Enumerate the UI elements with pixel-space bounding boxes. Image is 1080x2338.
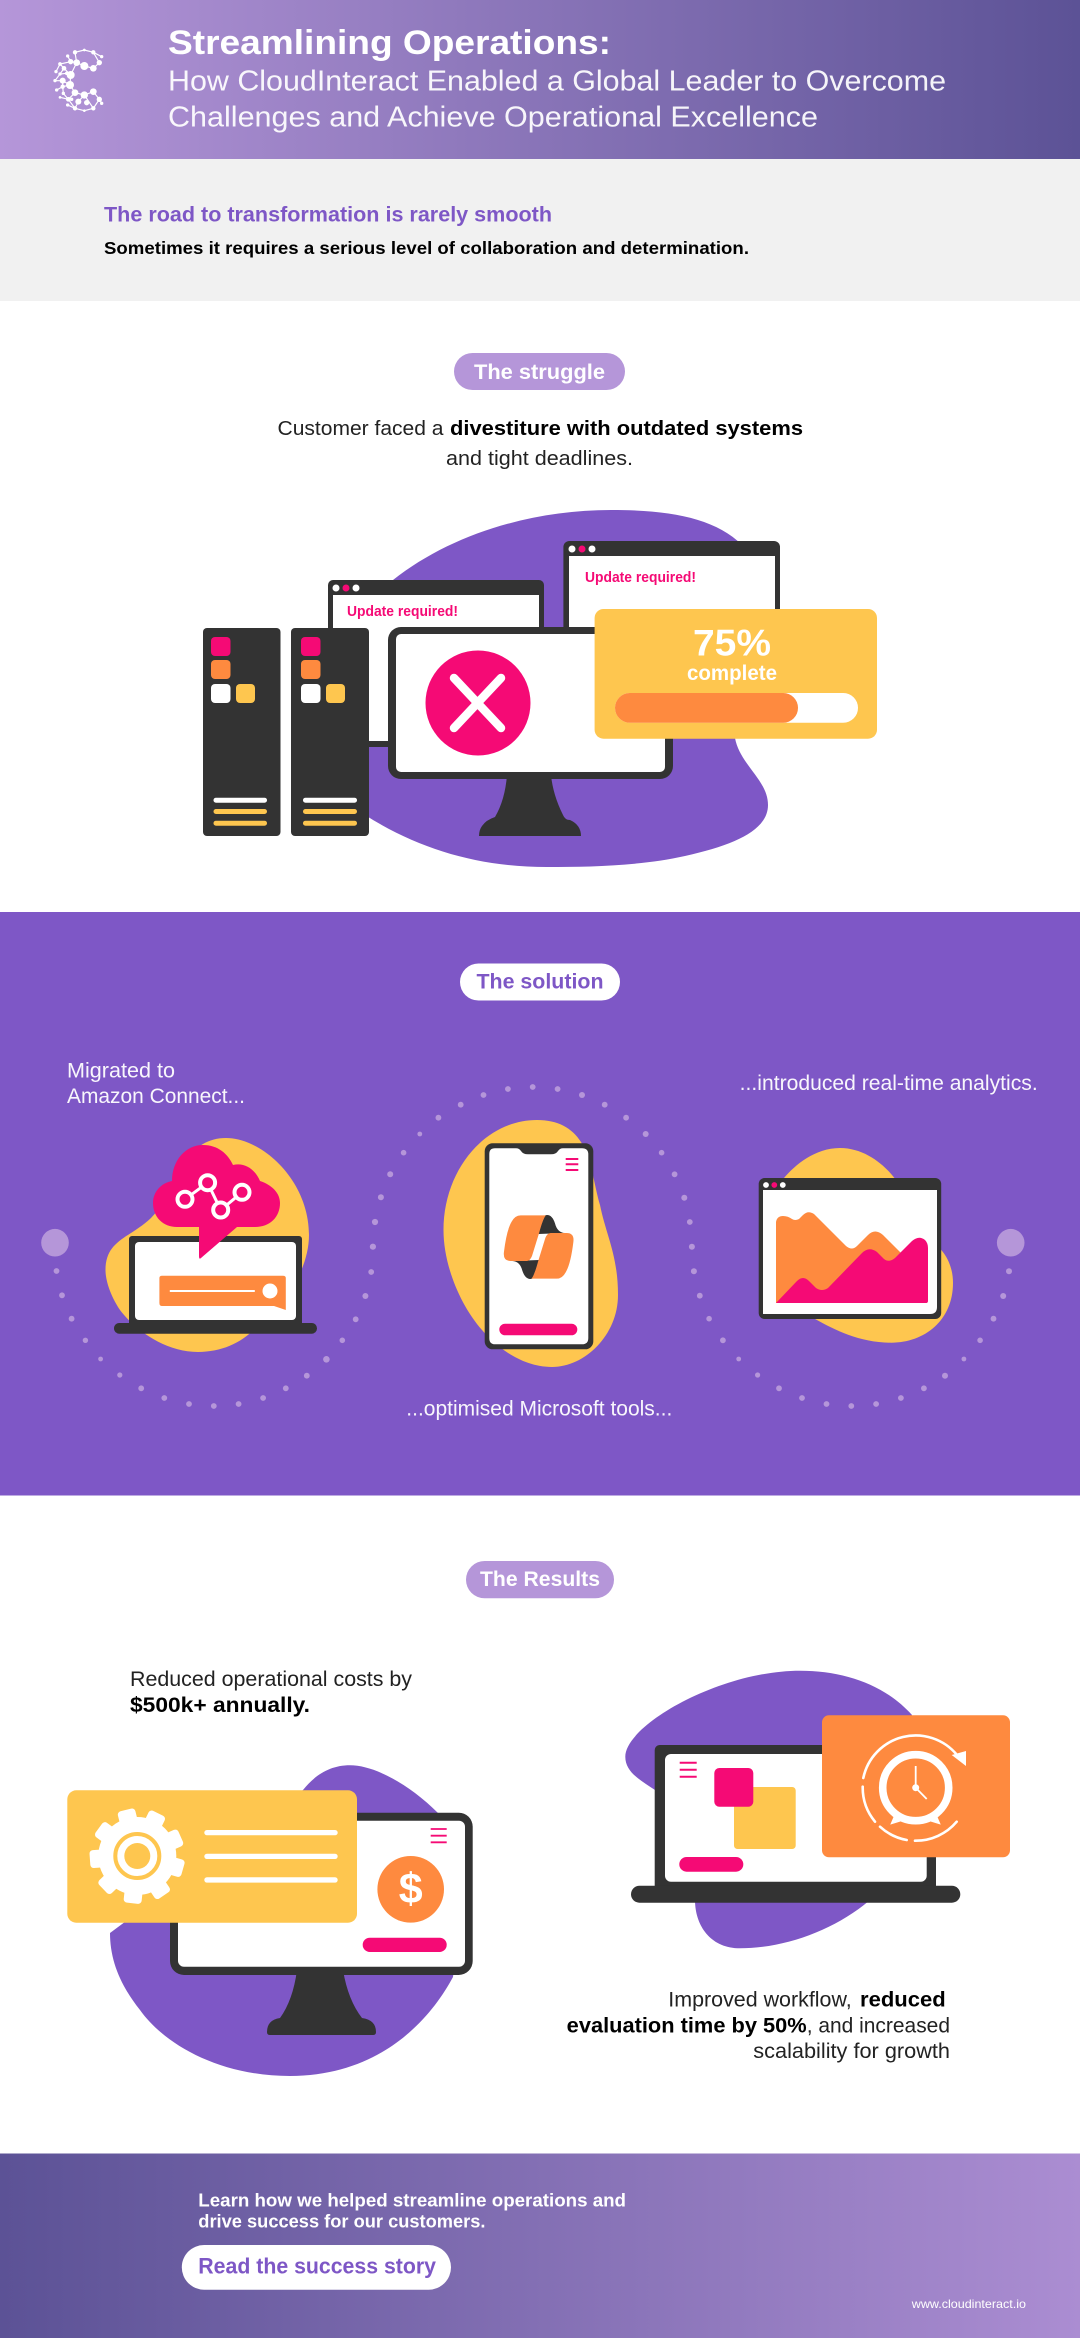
icon: dollar coin: $ (399, 1865, 423, 1913)
browser window (759, 1178, 941, 1319)
panel: the solution (0, 912, 1080, 1496)
label: optimised: ...optimised Microsoft tools... (406, 1398, 672, 1420)
background blob (365, 510, 768, 867)
purple blob (625, 1671, 912, 1948)
button (363, 1938, 447, 1952)
icon: menu (566, 1159, 578, 1170)
result text: costs: $500k+ annually. (130, 1694, 310, 1717)
pill heading: the results (466, 1561, 614, 1598)
icon: copilot logo (504, 1215, 574, 1279)
phone screen (489, 1148, 588, 1344)
icon: gear (89, 1808, 185, 1904)
title: Streamlining Operations: (168, 24, 611, 62)
button (679, 1857, 743, 1872)
website url: www.cloudinteract.io (911, 2297, 1026, 2311)
call to action text: drive success for our customers. (198, 2212, 486, 2232)
intro heading: The road to transformation is rarely smooth (104, 204, 552, 226)
area chart (776, 1212, 928, 1303)
subtitle: Challenges and Achieve Operational Excellence (168, 102, 818, 134)
struggle description: and tight deadlines. (446, 448, 633, 470)
pill heading: the results: The Results (480, 1568, 600, 1591)
dotted path (41, 1084, 1024, 1409)
illustration: phone with logo (444, 1120, 618, 1367)
label: migrated: Migrated to (67, 1060, 175, 1082)
result text: workflow (567, 1989, 950, 2063)
phone (485, 1143, 593, 1349)
window: update required left (328, 580, 544, 747)
result text: costs: Reduced operational costs by (130, 1668, 413, 1691)
button: read the success story: Read the success story (198, 2254, 437, 2278)
window: update required right: Update required! (585, 569, 696, 586)
call to action text: Learn how we helped streamline operations and (198, 2190, 626, 2210)
subtitle (168, 66, 946, 134)
illustration: laptop with cloud (106, 1138, 317, 1352)
illustration: cost savings (67, 1765, 473, 2076)
server left (203, 628, 280, 836)
header banner (0, 0, 1080, 159)
yellow blob (444, 1120, 618, 1367)
settings card (67, 1790, 357, 1923)
result text: workflow: , and increased (807, 2015, 950, 2038)
phone button (499, 1324, 577, 1335)
purple blob (110, 1765, 470, 2076)
progress card (595, 609, 877, 739)
yellow blob (106, 1138, 309, 1352)
yellow square (734, 1787, 796, 1849)
illustration: analytics window (759, 1148, 953, 1343)
label: migrated (67, 1060, 245, 1108)
result text: workflow: reduced (860, 1989, 946, 2012)
illustration: workflow (625, 1671, 1010, 1948)
result text: workflow: evaluation time by 50% (567, 2015, 807, 2038)
button: read the success story (182, 2245, 451, 2290)
intro text: Sometimes it requires a serious level of collaboration and determination. (104, 238, 749, 258)
result text: workflow: scalability for growth (753, 2040, 950, 2063)
subtitle: How CloudInteract Enabled a Global Leader to Overcome (168, 66, 946, 98)
pill heading: the solution: The solution (476, 971, 604, 994)
pill heading: the solution (460, 964, 620, 1000)
label: analytics: ...introduced real-time analytics. (740, 1072, 1038, 1095)
progress card: 75% (693, 622, 771, 664)
pill heading: the struggle (454, 353, 625, 390)
result text: workflow: Improved workflow, (668, 1989, 852, 2012)
icon: CloudInteract logo (53, 49, 103, 112)
call to action text (198, 2190, 626, 2232)
label: migrated: Amazon Connect... (67, 1085, 245, 1108)
struggle description: divestiture with outdated systems (450, 418, 803, 440)
cloud bubble (153, 1145, 280, 1259)
clock card (822, 1715, 1010, 1857)
laptop (114, 1236, 317, 1334)
icon: clock (863, 1735, 966, 1841)
window: update required right (563, 541, 780, 708)
illustration: struggle (203, 510, 877, 867)
result text: costs (130, 1668, 413, 1717)
monitor (170, 1813, 473, 2035)
laptop (631, 1745, 960, 1903)
pill heading: the struggle: The struggle (474, 361, 605, 384)
yellow blob (784, 1148, 953, 1343)
window dots (763, 1182, 786, 1188)
struggle description: Customer faced a (278, 418, 444, 440)
card lines (204, 1830, 338, 1883)
pink square (714, 1768, 753, 1807)
monitor with error (388, 627, 673, 836)
icon: error cross (426, 650, 530, 756)
intro band (0, 159, 1080, 301)
progress card: complete (687, 662, 777, 685)
window content (763, 1190, 937, 1314)
window: update required left: Update required! (347, 603, 458, 620)
icon: menu (431, 1829, 447, 1842)
footer banner (0, 2154, 1080, 2338)
icon: menu (680, 1763, 697, 1777)
struggle description (278, 418, 803, 470)
icon: dollar coin (377, 1856, 444, 1923)
server right (291, 628, 369, 836)
